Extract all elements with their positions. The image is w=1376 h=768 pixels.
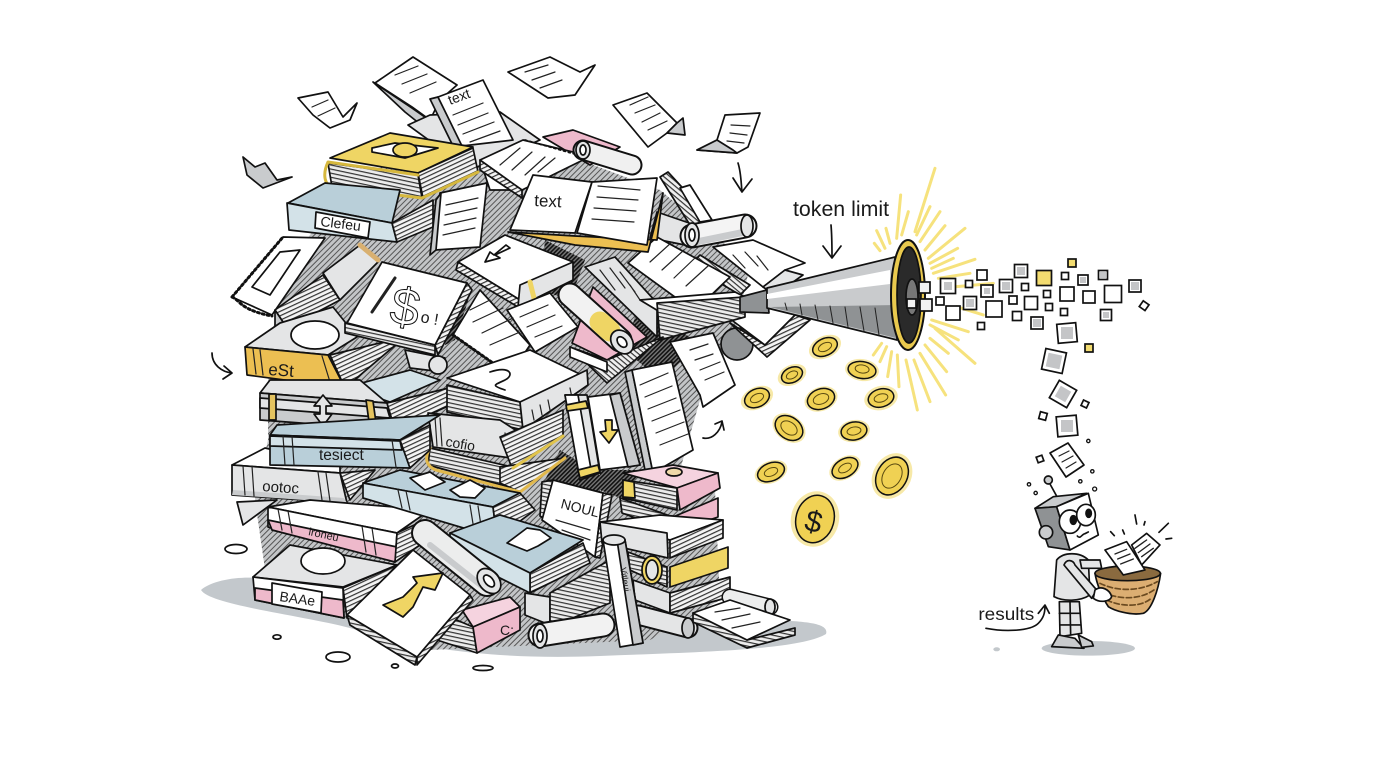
pink ironeu book: ironeu — [307, 526, 340, 544]
robot dots — [1027, 439, 1097, 495]
hatched band between pages — [690, 255, 750, 295]
small roll beneath dollar book — [405, 350, 447, 374]
token limit label: token limit — [793, 198, 889, 221]
blue tesiect book: tesiect — [319, 447, 364, 464]
paper stack behind roll — [660, 172, 712, 225]
rolled scroll top — [576, 141, 632, 165]
grey book bottom right stack — [633, 577, 730, 613]
notebook standing — [625, 362, 693, 473]
sparks — [1111, 515, 1172, 539]
pink book right stack — [623, 465, 720, 510]
book under megaphone — [721, 300, 810, 360]
book with yellow arrow — [588, 393, 640, 470]
book with dollar sign — [345, 262, 472, 355]
pink BAaE book — [253, 545, 397, 618]
cofio book — [428, 410, 563, 468]
yellow book right stack — [628, 547, 728, 587]
loose page under pile right — [670, 333, 735, 407]
bottom scrolls — [638, 597, 775, 638]
robot eyes — [1059, 504, 1095, 533]
bottom stacked book — [525, 560, 610, 627]
open book with text: text — [534, 191, 562, 211]
page right top — [713, 240, 805, 295]
book with arrow — [456, 235, 573, 307]
roll at right of open book — [650, 212, 753, 247]
sheet: open pages top — [373, 57, 457, 128]
open book with yellow arrow — [347, 550, 473, 665]
page right of yellow book — [430, 183, 487, 255]
grey ootoc book — [232, 448, 375, 525]
scroll diagonal — [425, 533, 506, 598]
loose sheet top centre — [508, 57, 595, 98]
robot with basket — [978, 439, 1172, 656]
robot antenna — [1044, 476, 1057, 497]
tall white cylinder with yellow band — [565, 395, 600, 480]
yellow book — [325, 133, 478, 198]
book with dollar sign: o ! — [419, 309, 440, 329]
arrow: curved up right of notebook — [703, 421, 724, 438]
rolled book — [275, 245, 380, 338]
blue Clefeu book: Clefeu — [320, 213, 362, 234]
blue middle book — [363, 470, 535, 538]
pink BAaE book: BAAe — [279, 588, 316, 609]
page with word text: text — [446, 85, 472, 108]
noul sheet: NOUL — [559, 495, 601, 520]
pile of books and documents — [232, 57, 810, 665]
megaphone — [740, 240, 925, 350]
robot legs — [1059, 602, 1082, 637]
pink book bottom: C: — [500, 622, 514, 638]
open book with text — [508, 175, 663, 252]
robot shadow — [1042, 641, 1135, 656]
tokens stream — [907, 259, 1149, 463]
noul sheet — [540, 480, 612, 558]
robot far arm — [1080, 560, 1102, 568]
page small — [507, 293, 578, 352]
torn grey sheet — [243, 157, 292, 188]
robot mouth — [1077, 532, 1088, 537]
white-grey book — [600, 515, 723, 558]
robot head — [1035, 493, 1098, 550]
spiral notebook — [480, 140, 583, 198]
ground specks and debris — [225, 544, 493, 670]
page with word text — [430, 80, 513, 150]
pink book behind the spiral notebook — [543, 130, 620, 165]
big white pages — [628, 237, 730, 320]
robot arm and hand — [1064, 561, 1112, 601]
megaphone rays — [873, 168, 993, 410]
tall scroll: Vitleui — [618, 567, 632, 592]
blue Clefeu book — [287, 183, 433, 242]
spiral page mid pile — [453, 290, 530, 375]
roll behind top — [408, 112, 540, 170]
curved book — [585, 257, 745, 340]
pink book with rolled scroll — [570, 287, 663, 383]
blue puzzle book — [450, 515, 590, 593]
horizontal bottom scroll — [533, 624, 603, 648]
coins — [737, 330, 920, 552]
robot feet — [1052, 635, 1084, 648]
tall scroll — [603, 535, 643, 647]
results label: results — [978, 604, 1035, 624]
falling sheet above robot — [1050, 443, 1084, 477]
arrow: downward near sheet — [733, 163, 752, 192]
arrow: token limit — [823, 225, 841, 258]
megaphone mouth — [891, 240, 925, 350]
open pages bottom right — [693, 600, 795, 648]
ground shadow under the pile — [201, 578, 826, 657]
spiral notebook left — [232, 237, 325, 316]
basket — [1095, 566, 1161, 614]
yellow-edged book below cofio — [427, 436, 565, 492]
arrow: left of pile — [212, 353, 232, 379]
results arrow — [986, 605, 1049, 630]
big white book mid — [447, 350, 588, 430]
loose sheet far left — [298, 92, 357, 128]
coins: $ — [801, 504, 826, 540]
cofio book: cofio — [444, 433, 477, 454]
megaphone horn — [767, 257, 897, 340]
grey book with blue book on top — [260, 370, 455, 430]
yellow-orange eSt book: eSt — [268, 360, 295, 381]
megaphone neck — [740, 290, 769, 313]
yellow-orange eSt book — [245, 307, 405, 388]
robot body — [1054, 554, 1090, 600]
backing of pile — [255, 140, 750, 650]
blue tesiect book — [270, 415, 440, 468]
pink book bottom — [437, 597, 520, 653]
pink ironeu book — [268, 500, 430, 562]
book with dollar sign: $ — [386, 277, 425, 339]
loose sheet curled — [697, 113, 760, 153]
grey ootoc book: ootoc — [262, 478, 300, 498]
loose sheet with folded corner — [613, 93, 685, 147]
second pink book — [620, 498, 718, 532]
basket papers — [1105, 533, 1160, 575]
dark hatched gaps — [440, 240, 700, 525]
